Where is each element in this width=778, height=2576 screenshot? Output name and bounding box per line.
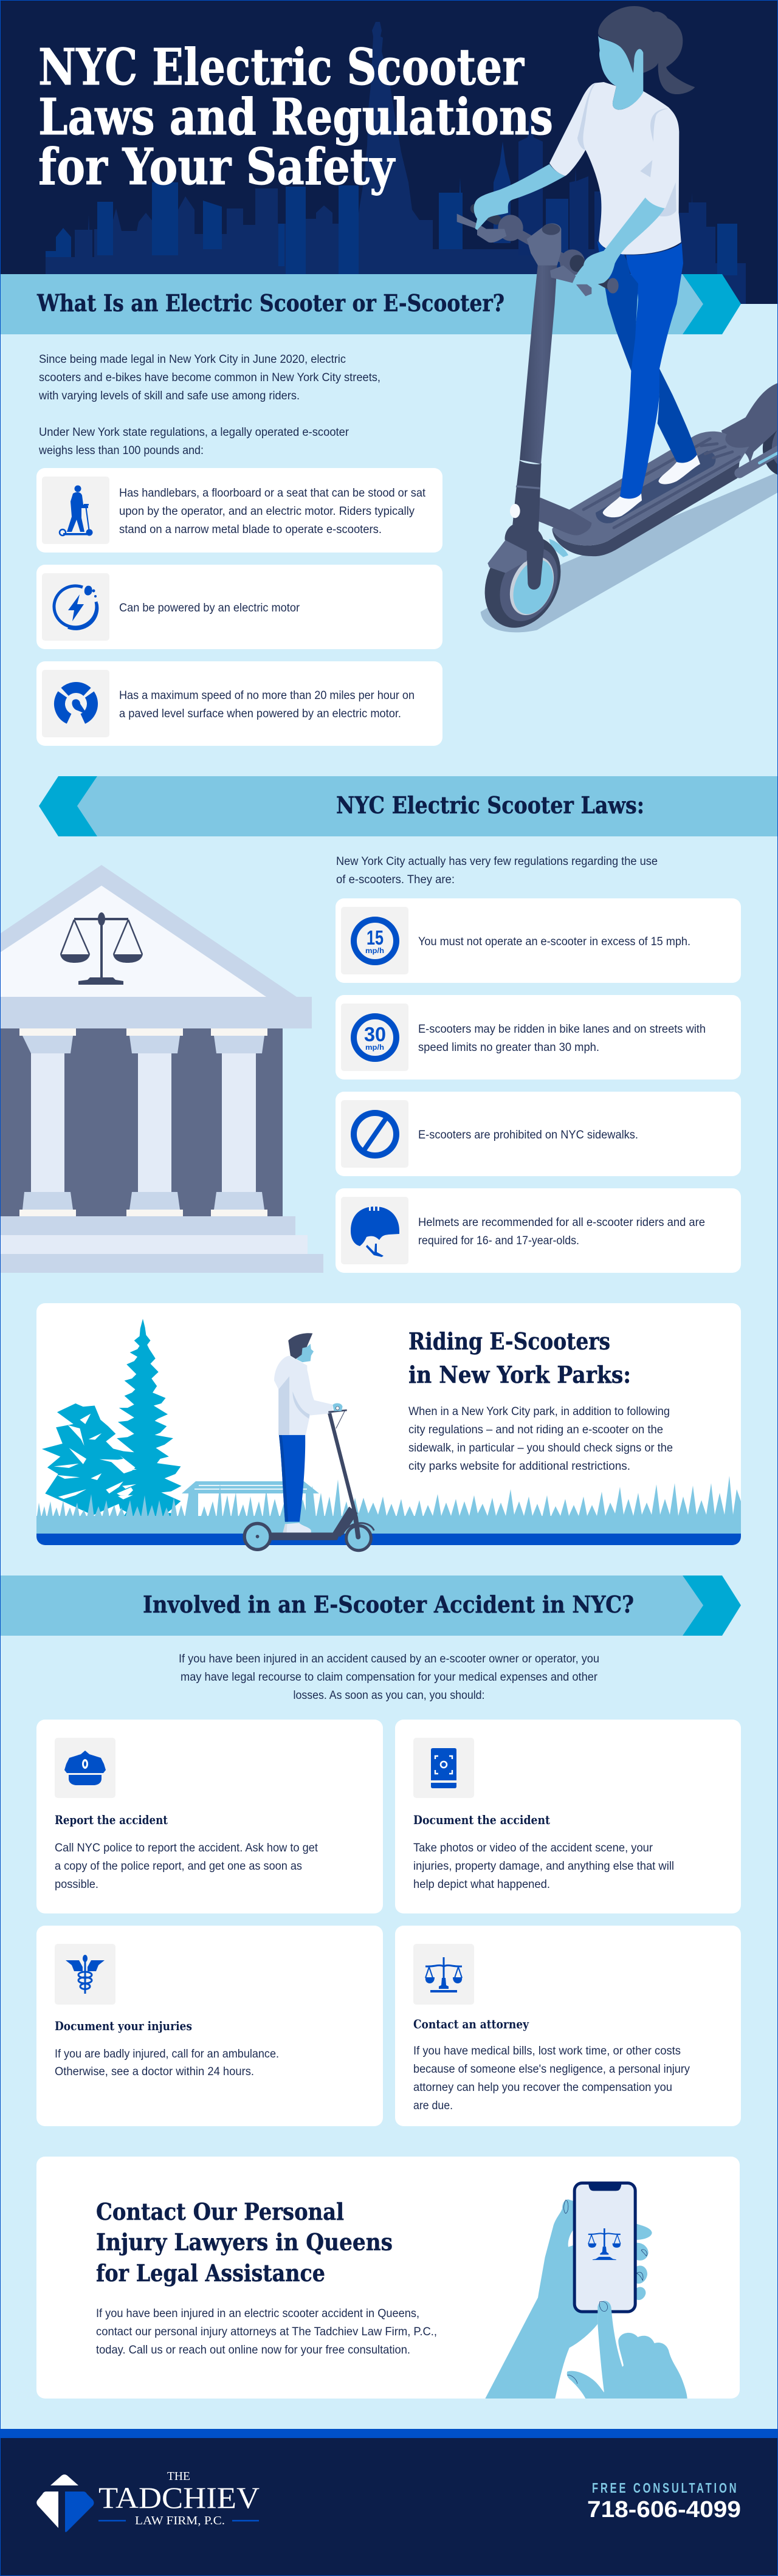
icon: 30 mph sign: 30 (364, 1023, 386, 1045)
card: report the accident: Report the accident (55, 1813, 168, 1827)
contact body text (96, 2307, 437, 2357)
illustration: hands holding phone (485, 2182, 687, 2399)
icon: 30 mph sign: mp/h (365, 1043, 384, 1052)
intro text: what is an e-scooter: with varying levels of skill and safe use among riders. (38, 390, 300, 402)
intro text: what is an e-scooter: Under New York state regulations, a legally operated e-scooter (39, 426, 349, 439)
card: contact an attorney: If you have medical bills, lost work time, or other costs (413, 2045, 681, 2058)
contact heading: Injury Lawyers in Queens (96, 2228, 393, 2256)
logo: The Tadchiev Law Firm: TADCHIEV (98, 2481, 260, 2515)
city skyline with Statue of Liberty (46, 22, 746, 304)
card: document your injuries: If you are badly injured, call for an ambulance. (55, 2048, 279, 2061)
card: contact an attorney: because of someone else's negligence, a personal injury (413, 2063, 690, 2076)
intro text: accident: If you have been injured in an accident caused by an e-scooter owner or operator, you (179, 1653, 599, 1665)
contact heading (96, 2198, 393, 2287)
card: contact an attorney: attorney can help you recover the compensation you (413, 2081, 672, 2094)
title: Laws and Regulations (38, 88, 553, 146)
illustration: courthouse (0, 865, 323, 1273)
logo: The Tadchiev Law Firm (36, 2470, 260, 2532)
intro text: what is an e-scooter: Since being made legal in New York City in June 2020, electric (39, 353, 346, 366)
icon: speedometer (54, 682, 98, 726)
contact body text: contact our personal injury attorneys at The Tadchiev Law Firm, P.C., (96, 2326, 437, 2338)
contact body text: today. Call us or reach out online now for your free consultation. (96, 2344, 410, 2357)
icon: scales of justice (60, 912, 143, 985)
panel: riding e-scooters in New York parks (36, 1303, 741, 1551)
icon: scales on phone screen (588, 2228, 621, 2260)
icon: lightning bolt in circle (54, 586, 97, 629)
card: document the accident: Document the accident (413, 1813, 551, 1827)
icon: person on scooter (60, 485, 92, 536)
card: maximum speed: Has a maximum speed of no more than 20 miles per hour on (119, 689, 415, 702)
card: report the accident: a copy of the police report, and get one as soon as (55, 1860, 302, 1873)
intro text: laws: New York City actually has very few regulations regarding the use (336, 855, 658, 868)
title: NYC Electric Scooter (38, 38, 525, 97)
section banner: NYC electric scooter laws: NYC Electric Scooter Laws: (336, 791, 644, 819)
free consultation label: FREE CONSULTATION (592, 2481, 737, 2496)
icon: 15 mph sign: 15 (367, 926, 384, 949)
section banner: NYC electric scooter laws (39, 776, 778, 836)
intro text: what is an e-scooter: weighs less than 100 pounds and: (38, 444, 204, 457)
parks heading (408, 1328, 631, 1388)
card: helmets: Helmets are recommended for all e-scooter riders and are (418, 1216, 705, 1229)
intro text: accident (179, 1653, 599, 1702)
logo: The Tadchiev Law Firm: LAW FIRM, P.C. (135, 2514, 225, 2527)
card: report the accident: Call NYC police to report the accident. Ask how to get (55, 1842, 318, 1855)
contact body text: If you have been injured in an electric scooter accident in Queens, (96, 2307, 419, 2320)
card: document your injuries: Document your injuries (55, 2019, 192, 2033)
card: contact an attorney: Contact an attorney (413, 2017, 529, 2031)
parks heading: Riding E-Scooters (408, 1328, 610, 1355)
parks body text (408, 1405, 673, 1473)
card: helmets: required for 16- and 17-year-olds. (418, 1235, 579, 1247)
icon: helmet (351, 1206, 399, 1257)
parks body text: city parks website for additional restrictions. (408, 1460, 630, 1473)
card: maximum speed (36, 661, 442, 746)
contact heading: Contact Our Personal (96, 2198, 344, 2225)
title: for Your Safety (38, 138, 396, 196)
illustration: trees (42, 1319, 182, 1525)
intro text: laws (336, 855, 658, 886)
card: handlebars and floorboard: upon by the operator, and an electric motor. Riders typically (119, 505, 415, 518)
card: document the accident: injuries, property damage, and anything else that will (413, 1860, 674, 1873)
card: handlebars and floorboard: Has handlebars, a floorboard or a seat that can be stood or sat (119, 487, 426, 500)
parks heading: in New York Parks: (408, 1361, 631, 1388)
icon: scales (425, 1957, 462, 1992)
card: 15 mph limit (336, 898, 741, 983)
section banner: involved in an accident: Involved in an E-Scooter Accident in NYC? (143, 1591, 634, 1618)
card: electric motor (36, 565, 442, 649)
card: electric motor: Can be powered by an electric motor (119, 602, 300, 615)
card: document your injuries (36, 1926, 383, 2126)
icon: 15 mph sign: mp/h (365, 946, 384, 955)
illustration: woman riding electric scooter (457, 6, 778, 640)
section banner: involved in an accident (0, 1576, 741, 1636)
card: report the accident: possible. (55, 1878, 98, 1891)
parks body text: city regulations – and not riding an e-scooter on the (408, 1424, 663, 1436)
card: document the accident (395, 1720, 741, 1913)
phone number: 718-606-4099 (587, 2497, 741, 2523)
section banner: what is an e-scooter (0, 274, 741, 334)
card: contact an attorney: are due. (413, 2099, 453, 2112)
card: document your injuries: Otherwise, see a doctor within 24 hours. (55, 2065, 254, 2078)
card: 30 mph streets: E-scooters may be ridden in bike lanes and on streets with (418, 1023, 706, 1036)
intro text: what is an e-scooter: scooters and e-bikes have become common in New York City streets, (39, 371, 380, 384)
intro text: accident: may have legal recourse to claim compensation for your medical expenses and other (181, 1671, 598, 1684)
illustration: man riding scooter (244, 1333, 374, 1551)
card: 30 mph streets: speed limits no greater than 30 mph. (418, 1041, 599, 1054)
icon: police cap (64, 1751, 106, 1785)
icon: 30 mph sign (354, 1016, 396, 1059)
icon: 15 mph sign (354, 920, 396, 962)
section banner: what is an e-scooter: What Is an Electric Scooter or E-Scooter? (36, 289, 504, 317)
parks body text: sidewalk, in particular – you should check signs or the (408, 1442, 673, 1455)
card: 30 mph streets (336, 995, 741, 1080)
parks body text: When in a New York City park, in addition to following (408, 1405, 670, 1418)
icon: prohibition sign (354, 1113, 396, 1155)
header background (0, 0, 778, 304)
card: handlebars and floorboard: stand on a narrow metal blade to operate e-scooters. (119, 523, 382, 536)
card: prohibited on sidewalks: E-scooters are prohibited on NYC sidewalks. (418, 1129, 638, 1142)
panel: contact our lawyers (36, 2157, 740, 2399)
icon: phone camera (431, 1748, 456, 1788)
illustration: grass (36, 1476, 741, 1545)
title (38, 38, 553, 196)
card: helmets (336, 1188, 741, 1273)
card: report the accident (36, 1720, 383, 1913)
card: contact an attorney (395, 1926, 741, 2126)
illustration: park bench (182, 1481, 319, 1524)
card: prohibited on sidewalks (336, 1092, 741, 1176)
icon: caduceus (66, 1955, 105, 1994)
card: maximum speed: a paved level surface when powered by an electric motor. (119, 708, 401, 720)
card: 15 mph limit: You must not operate an e-scooter in excess of 15 mph. (418, 935, 690, 948)
footer (0, 2429, 778, 2576)
logo: The Tadchiev Law Firm: THE (167, 2470, 190, 2483)
card: document the accident: Take photos or video of the accident scene, your (413, 1842, 653, 1855)
intro text: accident: losses. As soon as you can, you should: (293, 1689, 485, 1702)
card: handlebars and floorboard (36, 468, 442, 553)
intro text: laws: of e-scooters. They are: (336, 873, 455, 886)
intro text: what is an e-scooter (38, 353, 380, 457)
contact heading: for Legal Assistance (96, 2259, 325, 2287)
card: document the accident: help depict what happened. (413, 1878, 550, 1891)
